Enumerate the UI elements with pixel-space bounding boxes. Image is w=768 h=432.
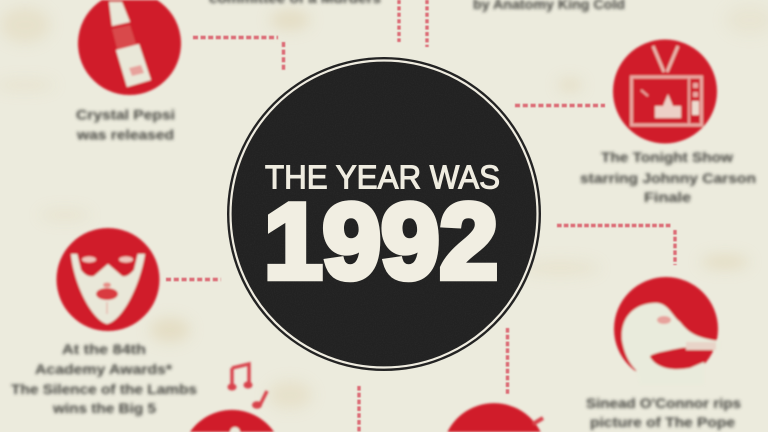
dashed connector: top pair xyxy=(399,0,427,47)
heading: 1992: 1992 xyxy=(264,181,498,301)
label: Crystal Pepsi xyxy=(76,108,175,122)
icon: music notes xyxy=(228,364,267,409)
label xyxy=(11,342,197,416)
dashed connector: Sinead O'Connor xyxy=(557,226,675,265)
panel: The Tonight Show xyxy=(580,40,756,205)
panel: Silence of the Lambs xyxy=(11,228,197,416)
label: The Silence of the Lambs xyxy=(11,382,197,397)
label: The Tonight Show xyxy=(601,150,734,165)
label xyxy=(76,108,175,142)
heading: the year was: THE YEAR WAS xyxy=(265,158,500,196)
label: starring Johnny Carson xyxy=(580,171,756,186)
label: At the 84th xyxy=(62,342,146,357)
label: Sinead O'Connor rips xyxy=(586,396,741,411)
label xyxy=(580,150,756,205)
icon: television xyxy=(613,40,717,144)
icon: red circle xyxy=(190,410,274,432)
dashed connector: Tonight Show xyxy=(515,104,605,107)
dashed connector: Academy Awards xyxy=(166,278,221,281)
dashed connector: Crystal Pepsi xyxy=(193,38,284,72)
label: wins the Big 5 xyxy=(52,401,157,416)
icon: bottle xyxy=(78,0,181,95)
panel: bottom right event xyxy=(447,403,543,432)
panel: bottom left music event xyxy=(190,364,274,432)
icon: red circle xyxy=(447,403,541,432)
dashed connector: bottom left xyxy=(357,386,361,432)
icon: profile face xyxy=(614,277,720,385)
label: Academy Awards* xyxy=(35,362,173,377)
label: picture of The Pope xyxy=(590,415,736,430)
label xyxy=(586,396,741,430)
panel: Sinead O'Connor xyxy=(586,277,741,430)
central badge xyxy=(227,57,541,371)
dashed connector: bottom right xyxy=(506,328,509,396)
panel: Crystal Pepsi xyxy=(76,0,181,142)
label: was released xyxy=(76,128,174,142)
icon: Hannibal mask xyxy=(56,228,160,331)
label: Finale xyxy=(644,190,692,205)
